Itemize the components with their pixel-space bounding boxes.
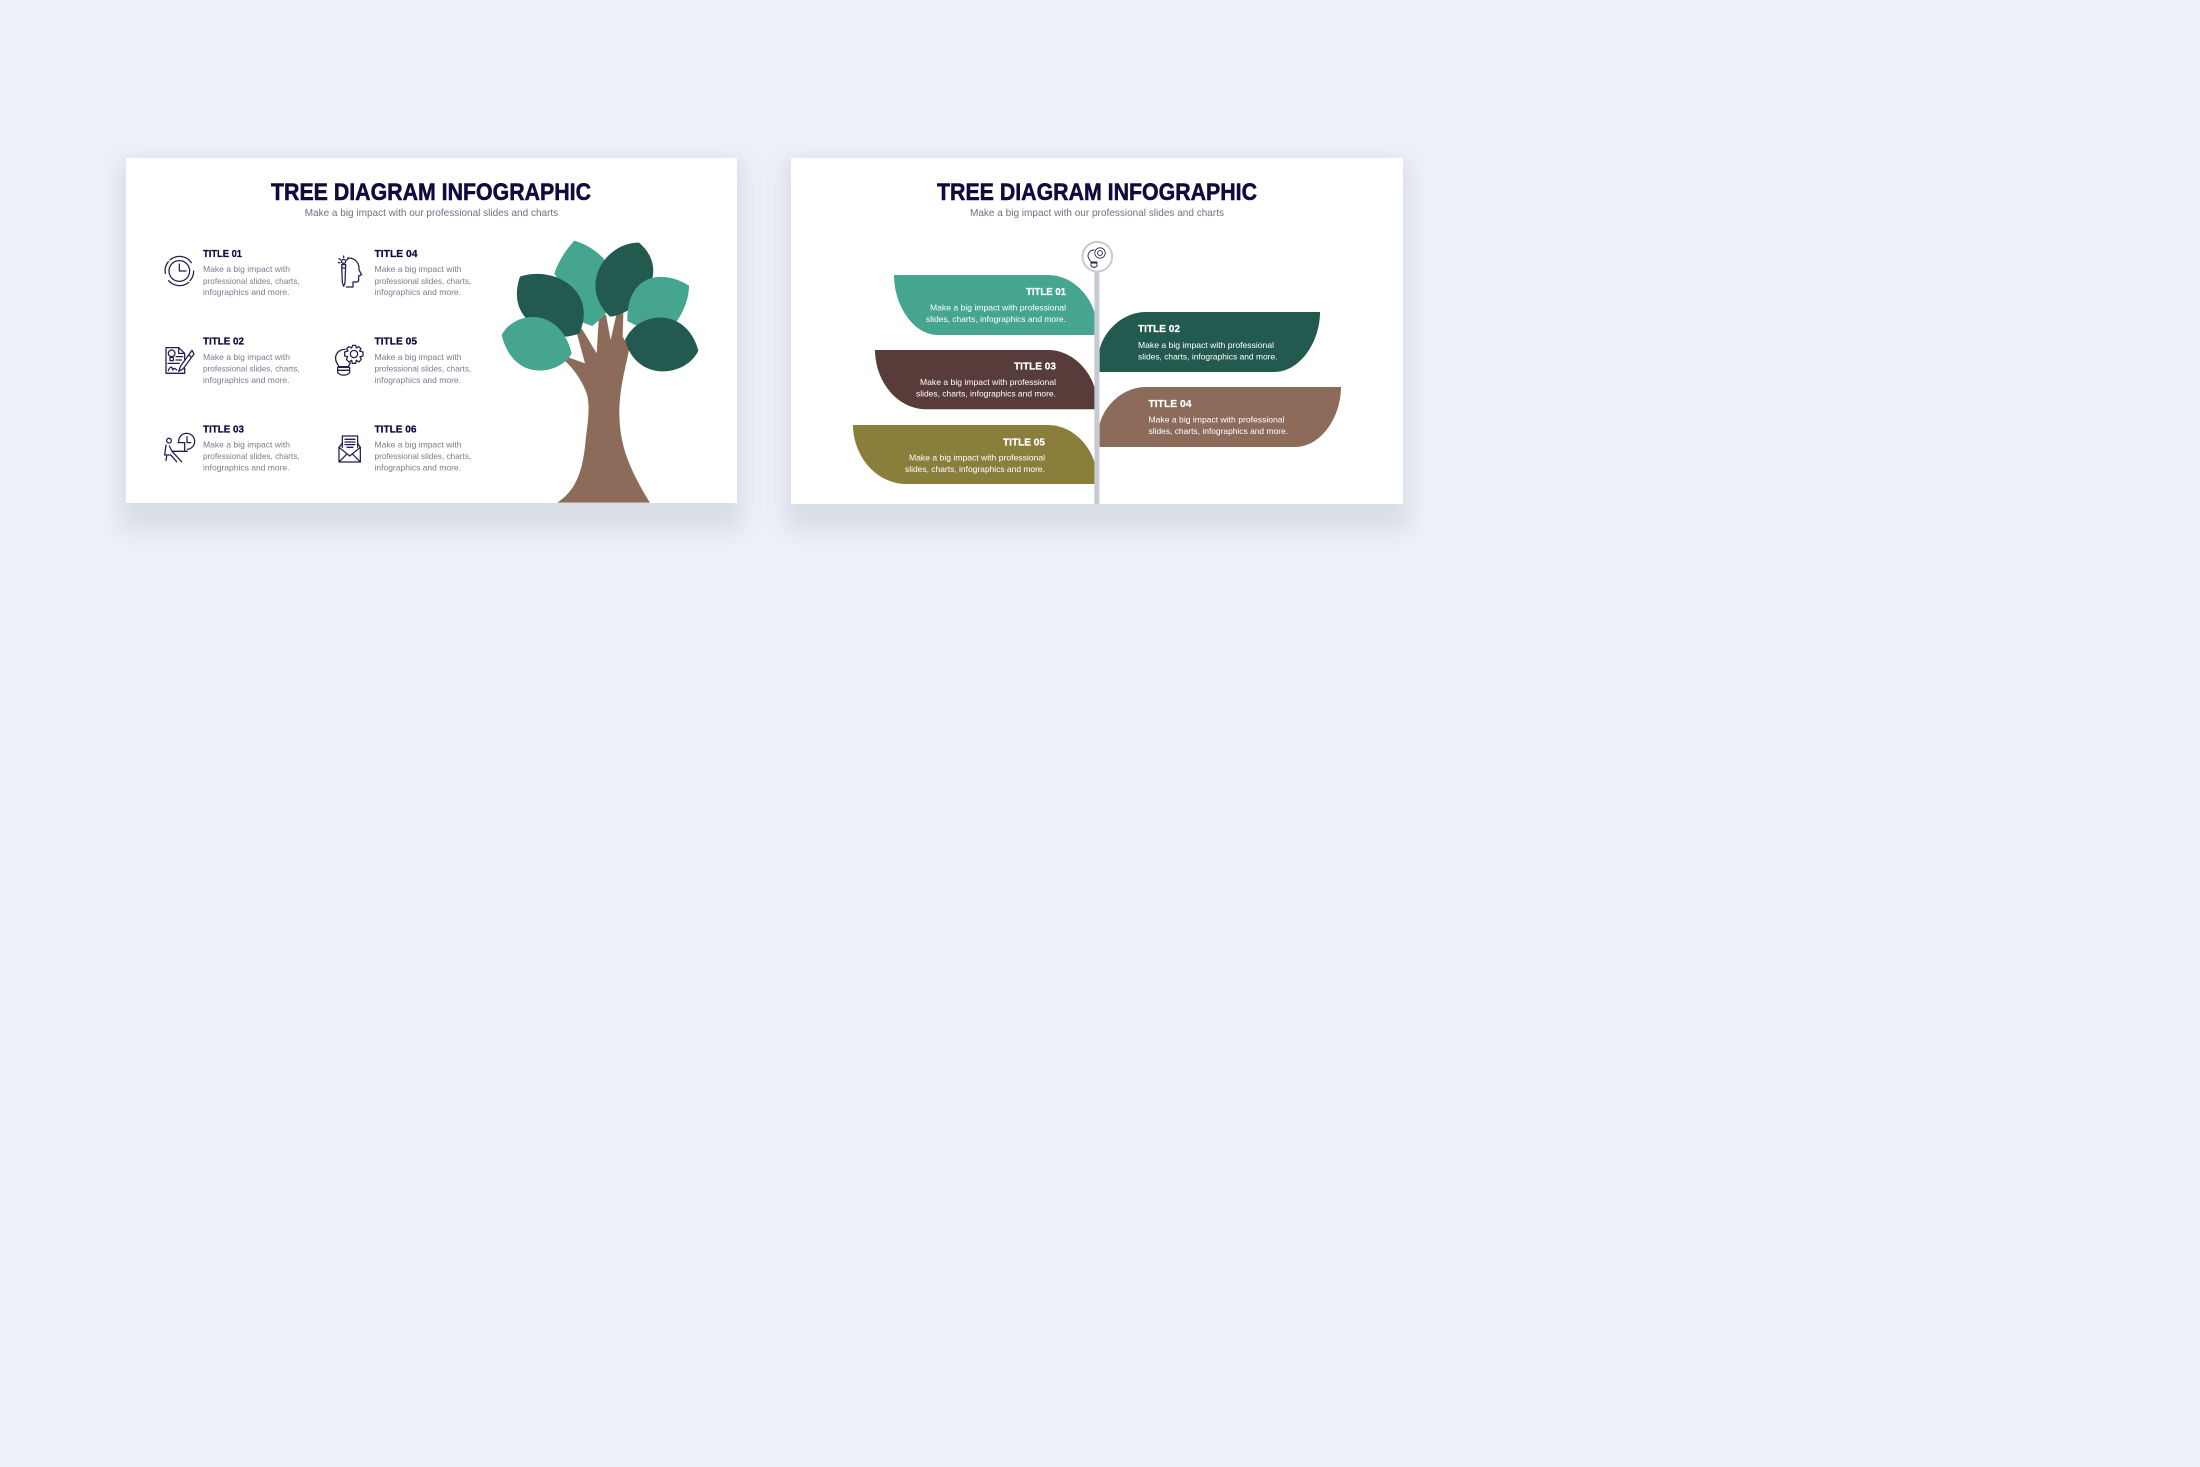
- leaf: right dark: [625, 318, 698, 371]
- text: left slide subtitle: Make a big impact with our professional slides and charts: [305, 207, 558, 219]
- item: title 05: Make a big impact with: [374, 352, 462, 362]
- icon: light bulb and gear: [336, 345, 363, 375]
- item: title 01: [165, 248, 300, 297]
- item: title 04: infographics and more.: [374, 287, 461, 297]
- leaf card: title 02: [1100, 312, 1320, 372]
- item: title 02: TITLE 02: [203, 336, 244, 348]
- item: title 04: TITLE 04: [374, 248, 418, 260]
- item: title 05: [336, 336, 471, 385]
- item: title 06: TITLE 06: [374, 424, 417, 436]
- icon: open envelope with letter: [339, 436, 360, 462]
- item: title 04: professional slides, charts,: [374, 276, 471, 286]
- icon: bulb and gear in circle: [1082, 242, 1112, 272]
- tree canopy: [502, 241, 698, 371]
- item: title 04: [338, 248, 471, 297]
- text: right slide subtitle: Make a big impact with our professional slides and charts: [970, 207, 1224, 219]
- item: title 06: Make a big impact with: [374, 440, 462, 450]
- item: title 05: TITLE 05: [374, 336, 417, 348]
- leaf card: title 04: Make a big impact with professional: [1148, 414, 1285, 424]
- panel: left slide, tree with six titles: [120, 158, 743, 530]
- item: title 04: Make a big impact with: [374, 264, 462, 274]
- heading: right slide title: TREE DIAGRAM INFOGRAPHIC: [937, 179, 1257, 206]
- item: title 05: professional slides, charts,: [374, 364, 471, 374]
- item: title 01: professional slides, charts,: [203, 276, 300, 286]
- leaf: top teal: [554, 241, 610, 326]
- icon: person at desk with clock: [165, 433, 195, 462]
- leaf card: title 05: slides, charts, infographics and more.: [905, 464, 1045, 474]
- item: title 02: [166, 336, 300, 385]
- leaf card: title 04: TITLE 04: [1148, 398, 1192, 410]
- leaf card: title 01: TITLE 01: [1026, 286, 1066, 298]
- leaf card: title 03: slides, charts, infographics and more.: [916, 388, 1056, 398]
- item: title 03: TITLE 03: [203, 424, 244, 436]
- icon: head with pencil: [338, 256, 362, 287]
- heading: left slide title: TREE DIAGRAM INFOGRAPHIC: [271, 179, 591, 206]
- item: title 01: TITLE 01: [203, 248, 242, 260]
- leaf card: title 05: Make a big impact with professional: [909, 452, 1045, 462]
- leaf card: title 02: Make a big impact with professional: [1138, 340, 1274, 350]
- item: title 01: infographics and more.: [203, 287, 290, 297]
- stem line: [1094, 272, 1099, 504]
- item: title 05: infographics and more.: [374, 375, 461, 385]
- item: title 01: Make a big impact with: [203, 264, 290, 274]
- leaf: left dark: [517, 274, 584, 337]
- item: title 02: infographics and more.: [203, 375, 290, 385]
- leaf card: title 03: Make a big impact with professional: [920, 377, 1056, 387]
- leaf: left teal: [502, 317, 572, 371]
- item: title 03: [165, 424, 300, 472]
- leaf card: title 02: TITLE 02: [1138, 323, 1180, 335]
- item: title 02: Make a big impact with: [203, 352, 290, 362]
- item: title 06: professional slides, charts,: [374, 451, 471, 461]
- item: title 06: [339, 424, 471, 472]
- leaf: top dark: [595, 243, 653, 317]
- item: title 02: professional slides, charts,: [203, 364, 300, 374]
- item: title 03: professional slides, charts,: [203, 451, 300, 461]
- tree trunk: [557, 313, 650, 503]
- leaf card: title 04: slides, charts, infographics and more.: [1148, 426, 1288, 436]
- leaf: right teal: [627, 277, 689, 328]
- leaf card: title 05: TITLE 05: [1003, 436, 1045, 448]
- leaf card: title 03: TITLE 03: [1014, 360, 1056, 372]
- item: title 03: infographics and more.: [203, 462, 290, 472]
- leaf card: title 01: Make a big impact with professional: [930, 302, 1066, 312]
- chart: tree with leaves: [502, 241, 698, 503]
- icon: clock: [165, 256, 194, 286]
- item: title 06: infographics and more.: [374, 462, 461, 472]
- panel: right slide, stem with leaf cards: [785, 158, 1409, 530]
- leaf card: title 01: slides, charts, infographics and more.: [926, 314, 1066, 324]
- icon: document and pen: [166, 348, 194, 373]
- leaf card: title 04: [1100, 387, 1341, 447]
- leaf card: title 02: slides, charts, infographics and more.: [1138, 352, 1278, 362]
- leaf card: title 03: [875, 350, 1094, 409]
- item: title 03: Make a big impact with: [203, 440, 290, 450]
- leaf card: title 01: [894, 275, 1094, 335]
- leaf card: title 05: [853, 425, 1094, 484]
